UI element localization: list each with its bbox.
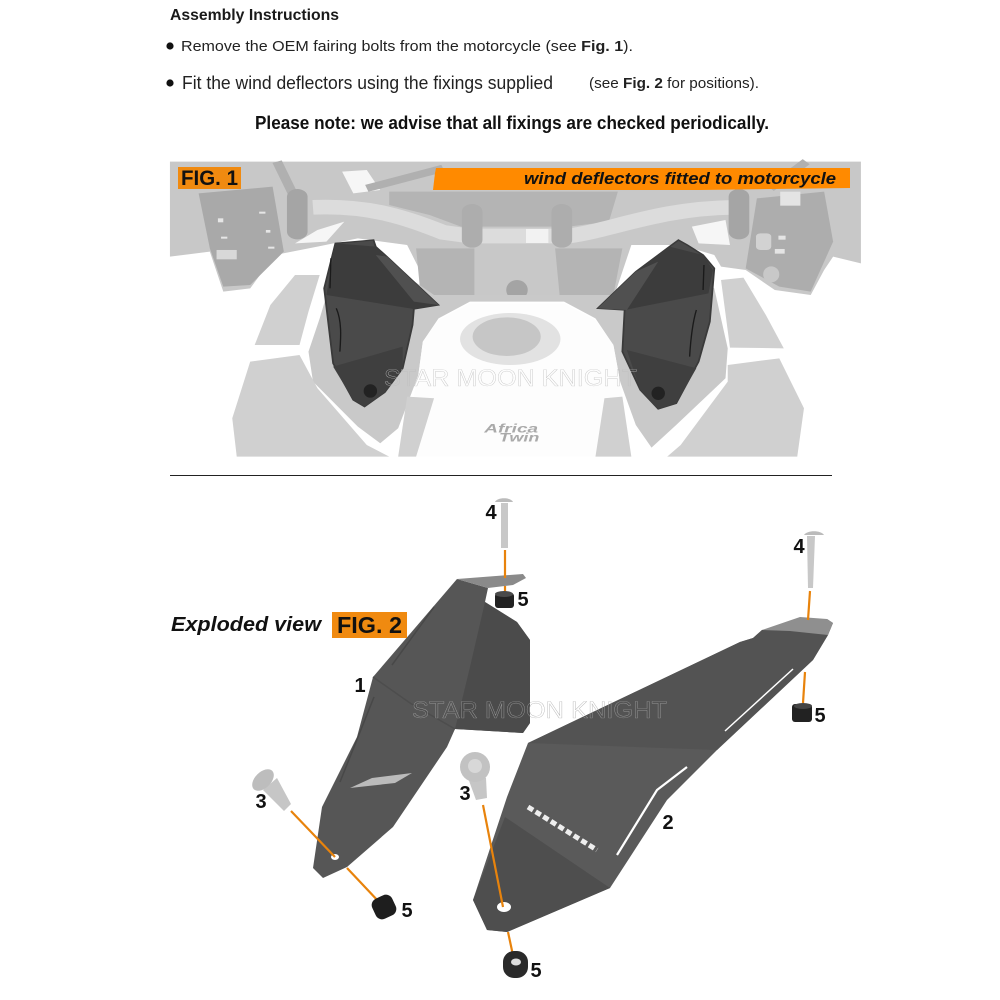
bolt 4 left <box>495 498 513 548</box>
photo: fuel cap <box>460 313 560 365</box>
spacer 5 right <box>792 703 812 722</box>
part numbers: 3 <box>459 783 471 805</box>
photo: dark dash detail <box>389 192 622 295</box>
photo: cables <box>277 162 806 198</box>
instruction 2: Fit the wind deflectors using the fixings supplied <box>182 73 553 93</box>
instruction 2 <box>166 73 759 93</box>
bolt 4 right <box>804 531 824 588</box>
watermark: STAR MOON KNIGHT <box>384 365 637 392</box>
part 2 hole <box>497 902 511 912</box>
photo: right deflector <box>598 240 714 409</box>
photo: handlebar <box>313 207 734 236</box>
instruction 1: Remove the OEM fairing bolts from the motorcycle (see Fig. 1). <box>181 38 633 55</box>
part 2 logo <box>528 807 597 850</box>
photo: white tank <box>400 303 631 457</box>
heading: assembly instructions: Assembly Instructions <box>170 7 339 24</box>
part numbers: 5 <box>814 705 826 727</box>
photo: white gaps <box>295 170 730 245</box>
photo: fuel cap centre <box>473 317 541 356</box>
photo: ignition <box>506 280 528 300</box>
bolt 3 left <box>248 765 291 811</box>
part 2: right deflector <box>473 617 833 932</box>
part 1: left deflector <box>313 574 530 878</box>
photo: africa twin logo: Africa <box>483 422 538 436</box>
instruction 2: (see Fig. 2 for positions). <box>589 75 759 92</box>
spacer 5 left bottom <box>369 892 399 922</box>
bolt 3 right <box>460 752 490 800</box>
note: Please note: we advise that all fixings are checked periodically. <box>255 113 769 133</box>
photo: tank surround <box>308 248 728 448</box>
banner: wind deflectors fitted <box>433 168 850 190</box>
part 1 fold <box>373 677 455 729</box>
watermark: STAR MOON KNIGHT <box>412 697 667 724</box>
part numbers: 3 <box>255 791 267 813</box>
part 2 slots <box>725 669 793 731</box>
part numbers <box>255 502 826 982</box>
part 1 hole <box>331 854 339 860</box>
panel: fig 1 motorcycle photo <box>170 162 861 457</box>
photo: right pod buttons <box>756 192 800 282</box>
part numbers: 2 <box>662 812 674 834</box>
spacer 5 top left <box>495 591 514 608</box>
photo: left switch pod <box>199 187 284 287</box>
figure label: fig 2: FIG. 2 <box>337 612 402 638</box>
photo: bar end grips <box>297 197 739 232</box>
photo: clamp label <box>526 229 548 243</box>
banner: wind deflectors fitted: wind deflectors fitted to motorcycle <box>524 169 836 188</box>
photo: left deflector <box>324 240 439 407</box>
orange guide lines <box>291 550 810 960</box>
part numbers: 4 <box>485 502 497 524</box>
heading: exploded view: Exploded view <box>171 614 323 636</box>
part 2 lower fold <box>473 817 610 932</box>
spacer 5 bottom <box>503 951 528 978</box>
photo: right switch pod <box>746 192 833 292</box>
photo: africa twin logo: Twin <box>499 432 540 445</box>
photo: africa twin logo <box>483 422 540 445</box>
photo: bar clamps <box>472 212 562 240</box>
part 1 logo <box>350 773 412 788</box>
divider <box>170 474 832 476</box>
photo: left pod buttons <box>217 212 274 259</box>
photo: fairing right <box>595 278 804 457</box>
part 1 mounting tab <box>457 574 526 588</box>
part 1 dark side <box>455 602 530 733</box>
part 2 mounting tab <box>762 617 833 635</box>
part 1 faint slots <box>340 607 434 782</box>
part numbers: 5 <box>401 900 413 922</box>
part numbers: 5 <box>517 589 529 611</box>
part numbers: 4 <box>793 536 805 558</box>
part numbers: 5 <box>530 960 542 982</box>
part 2 upper tone <box>528 630 828 750</box>
label: fig 1: FIG. 1 <box>181 167 238 190</box>
photo: fairing left <box>232 275 434 457</box>
photo: dash and controls <box>170 162 861 298</box>
part numbers: 1 <box>354 675 366 697</box>
